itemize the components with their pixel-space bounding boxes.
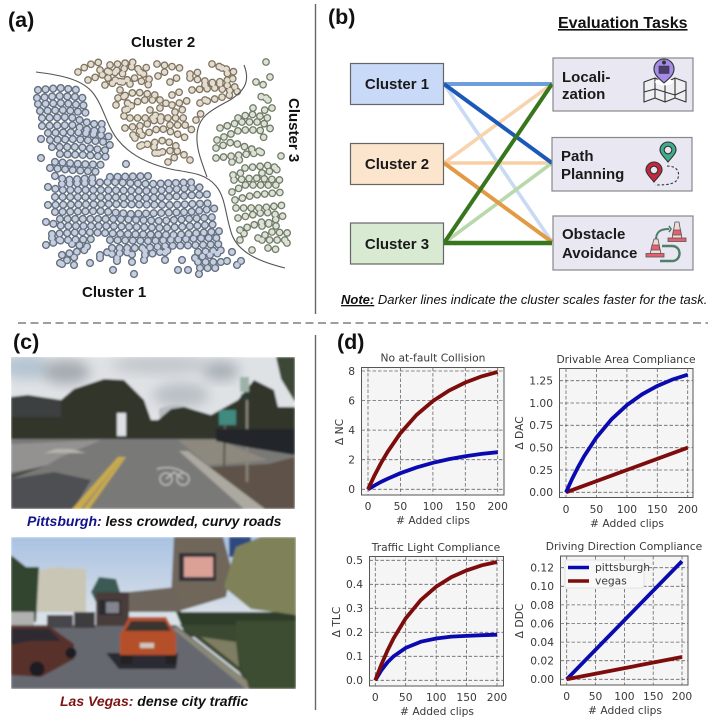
chart: No at-fault Collision: # Added clips [396, 514, 470, 527]
task box: Obstacle Avoidance: Avoidance [562, 245, 637, 262]
box: Cluster 3 [350, 223, 444, 264]
chart: Traffic Light Compliance: 0.0 [346, 674, 363, 687]
chart: Driving Direction Compliance: 0.08 [530, 599, 554, 612]
panel: (d) line charts [330, 330, 702, 717]
photo: Pittsburgh road scene [1, 355, 295, 509]
chart: Traffic Light Compliance: 0 [372, 691, 379, 704]
chart legend: pittsburgh [595, 561, 650, 574]
panel divider: upper vertical rule [314, 4, 316, 314]
box: Cluster 1 [350, 64, 444, 104]
panel: (b) cluster-task mapping [328, 5, 707, 307]
scatter: cluster 3 points [216, 62, 288, 250]
heading: (d): (d) [337, 330, 364, 354]
chart: Traffic Light Compliance: 0.1 [346, 650, 363, 663]
chart: No at-fault Collision: 8 [348, 365, 355, 378]
chart: Drivable Area Compliance: 0 [563, 503, 570, 516]
task box: Path Planning: Planning [561, 166, 624, 183]
chart: Drivable Area Compliance: 150 [647, 503, 668, 516]
panel: (c) example scenes [1, 330, 296, 709]
icon: route pins [646, 142, 679, 185]
scatter: cluster 2 points [78, 62, 240, 162]
task box: Obstacle Avoidance [553, 216, 693, 270]
chart: Drivable Area Compliance: 50 [590, 503, 603, 516]
chart legend: vegas [595, 574, 627, 588]
chart: Traffic Light Compliance: 50 [399, 691, 413, 704]
chart: Traffic Light Compliance: 100 [426, 691, 447, 704]
chart: No at-fault Collision: 0 [348, 483, 355, 496]
chart: Traffic Light Compliance [330, 541, 507, 717]
task box: Obstacle Avoidance: Obstacle [562, 226, 625, 243]
label: Cluster 2: Cluster 2 [131, 34, 195, 51]
panel divider: lower vertical rule [314, 335, 316, 710]
chart: Traffic Light Compliance: 0.5 [346, 554, 363, 567]
chart: Traffic Light Compliance: 200 [487, 691, 507, 704]
task box: Localization: Locali- [562, 69, 610, 86]
chart: Drivable Area Compliance [513, 353, 698, 530]
chart: No at-fault Collision: 2 [348, 454, 355, 466]
chart: Driving Direction Compliance: 0.12 [530, 562, 554, 574]
task box: Path Planning [552, 138, 692, 191]
chart: No at-fault Collision: 4 [348, 424, 355, 437]
chart: Drivable Area Compliance: 0.50 [529, 442, 553, 454]
task box: Localization [553, 58, 693, 111]
note text: Note: Darker lines indicate the cluster scales faster for the task. [341, 292, 707, 307]
label: Cluster 1: Cluster 1 [82, 284, 146, 301]
chart: Driving Direction Compliance: 0.06 [530, 618, 554, 630]
chart: Drivable Area Compliance: 100 [617, 503, 637, 516]
connector lines [444, 84, 552, 243]
chart: Traffic Light Compliance: 0.3 [346, 602, 363, 615]
heading: Evaluation Tasks: Evaluation Tasks [558, 15, 688, 32]
chart: Drivable Area Compliance: Δ DAC [513, 416, 526, 450]
caption: Pittsburgh: Pittsburgh: less crowded, curvy roads [27, 513, 282, 529]
chart: No at-fault Collision: Δ NC [333, 419, 346, 445]
chart: Driving Direction Compliance: # Added clips [588, 704, 662, 717]
chart: Driving Direction Compliance: 0.04 [530, 636, 554, 649]
chart: Driving Direction Compliance: 200 [672, 690, 692, 703]
heading: (a): (a) [8, 8, 34, 32]
chart: Traffic Light Compliance: 0.4 [346, 578, 363, 591]
chart: Driving Direction Compliance: 100 [614, 690, 635, 703]
chart: No at-fault Collision: 150 [455, 500, 476, 513]
box: Cluster 3: Cluster 3 [365, 236, 429, 253]
cluster boundary curves [36, 65, 285, 268]
chart: Traffic Light Compliance: Δ TLC [330, 607, 343, 637]
chart: Driving Direction Compliance: Δ DDC [513, 604, 526, 638]
box: Cluster 2: Cluster 2 [365, 156, 429, 173]
icon: cones and arrow [646, 222, 686, 261]
chart: Drivable Area Compliance: 0.25 [529, 464, 553, 477]
chart: Drivable Area Compliance: # Added clips [590, 517, 664, 530]
chart: No at-fault Collision: 200 [487, 500, 508, 513]
chart: Driving Direction Compliance: 0 [563, 690, 570, 703]
scatter: cluster 1 points [37, 88, 241, 274]
chart: No at-fault Collision: 0 [365, 500, 372, 513]
panel: (a) cluster scatter [8, 8, 302, 301]
chart: No at-fault Collision: 50 [394, 500, 407, 513]
icon: map with robot pin [644, 59, 686, 102]
task box: Localization: zation [562, 86, 605, 103]
chart: Driving Direction Compliance: 50 [589, 690, 602, 703]
chart: Drivable Area Compliance: 1.00 [529, 397, 553, 410]
chart: Driving Direction Compliance: 150 [643, 690, 664, 703]
chart: Driving Direction Compliance: Driving Direction Compliance [546, 540, 702, 553]
chart: Traffic Light Compliance: Traffic Light Compliance [371, 541, 500, 554]
chart: Drivable Area Compliance: 1.25 [529, 374, 553, 388]
chart: Driving Direction Compliance [513, 540, 702, 717]
chart: Driving Direction Compliance: 0.02 [530, 654, 554, 668]
label: Cluster 3: Cluster 3 [285, 98, 302, 162]
chart: No at-fault Collision: 6 [348, 394, 355, 408]
chart: Drivable Area Compliance: Drivable Area Compliance [556, 353, 696, 366]
box: Cluster 2 [350, 144, 444, 184]
chart: Drivable Area Compliance: 0.00 [529, 486, 553, 499]
caption: Las Vegas: Las Vegas: dense city traffic [60, 693, 249, 709]
photo: Las Vegas city traffic [11, 537, 296, 689]
heading: (c): (c) [13, 330, 39, 354]
chart: Traffic Light Compliance: 150 [456, 691, 477, 704]
chart: Traffic Light Compliance: 0.2 [346, 626, 363, 639]
chart: Drivable Area Compliance: 200 [677, 503, 698, 516]
chart: No at-fault Collision: 100 [423, 500, 443, 513]
chart: Driving Direction Compliance: 0.10 [530, 580, 554, 593]
chart: No at-fault Collision [333, 352, 508, 527]
heading: (b): (b) [328, 5, 355, 29]
chart legend [565, 560, 650, 588]
chart: No at-fault Collision: No at-fault Collision [381, 352, 485, 364]
chart: Drivable Area Compliance: 0.75 [529, 419, 553, 432]
section divider: dashed horizontal rule [18, 322, 708, 324]
task box: Path Planning: Path [561, 148, 594, 165]
box: Cluster 1: Cluster 1 [365, 76, 429, 93]
chart: Driving Direction Compliance: 0.00 [530, 673, 554, 686]
